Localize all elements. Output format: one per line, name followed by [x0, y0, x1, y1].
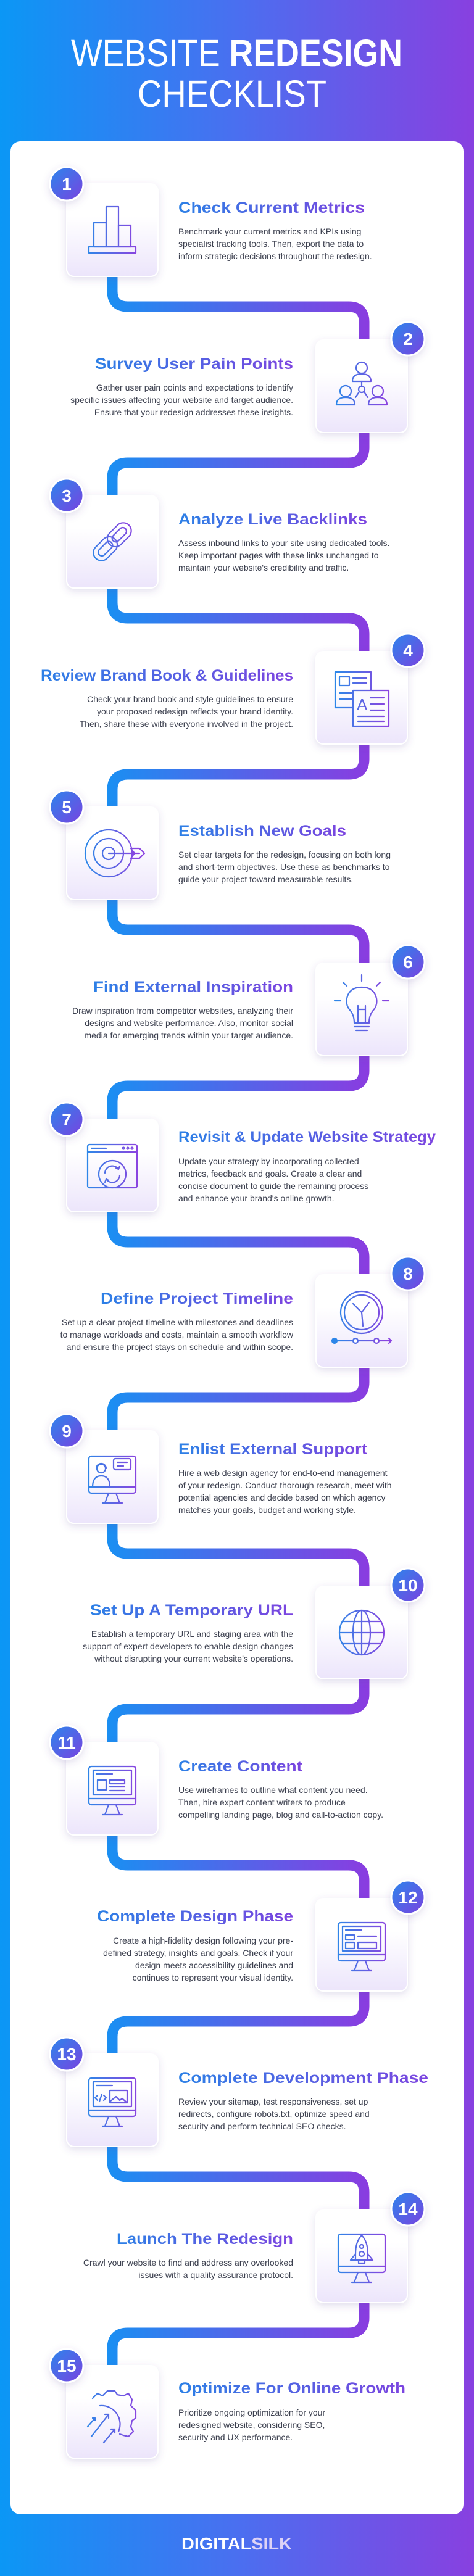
icon: gear with arrows: [88, 2391, 136, 2443]
body 8: Set up a clear project timeline with milestones and deadlines: [62, 1317, 293, 1327]
step 11: Create Content: [50, 1726, 383, 1835]
icon box 11: [67, 1742, 158, 1835]
body 13: Review your sitemap, test responsiveness, set up: [178, 2097, 368, 2106]
heading 7: Revisit & Update Website Strategy: [178, 1129, 436, 1146]
body 2: specific issues affecting your website and target audience.: [70, 395, 293, 405]
body 8: to manage workloads and costs, maintain a smooth workflow: [60, 1330, 294, 1340]
heading 1: Check Current Metrics: [178, 199, 365, 217]
heading 3: Analyze Live Backlinks: [178, 511, 367, 528]
heading 2: Survey User Pain Points: [95, 355, 293, 373]
step 10: Set Up A Temporary URL: [83, 1568, 425, 1679]
badge 7: 7: [62, 1110, 72, 1129]
badge 8: [391, 1257, 425, 1290]
body 3: Keep important pages with these links unchanged to: [178, 550, 379, 560]
body 7: concise document to guide the remaining process: [178, 1181, 368, 1191]
step 12: Complete Design Phase: [97, 1881, 425, 1991]
body 1: inform strategic decisions throughout the redesign.: [178, 251, 372, 261]
body 4: Then, share these with everyone involved in the project.: [80, 719, 293, 729]
icon: monitor layout: [89, 1766, 136, 1815]
heading 5: Establish New Goals: [178, 822, 346, 840]
body 5: and short-term objectives. Use these as benchmarks to: [178, 862, 390, 872]
body 11: Then, hire expert content writers to produce: [178, 1797, 346, 1807]
title: CHECKLIST: [138, 73, 326, 115]
badge 3: 3: [62, 486, 72, 505]
badge 6: 6: [403, 953, 413, 972]
badge 15: 15: [57, 2356, 77, 2375]
badge 4: 4: [403, 641, 413, 660]
body 9: of your redesign. Conduct thorough research, meet with: [178, 1480, 392, 1490]
badge 2: 2: [403, 329, 413, 349]
icon: monitor design: [338, 1923, 385, 1971]
badge 12: [391, 1881, 425, 1914]
icon: documents: [335, 672, 389, 726]
icon: light bulb: [335, 975, 389, 1030]
title: WEBSITE REDESIGN: [71, 32, 402, 74]
icon box 3: [67, 495, 158, 588]
step 4: Review Brand Book & Guidelines: [41, 634, 425, 744]
badge 13: 13: [57, 2045, 77, 2064]
icon: bar chart: [89, 207, 136, 253]
body 14: Crawl your website to find and address any overlooked: [83, 2258, 293, 2267]
heading 15: Optimize For Online Growth: [178, 2380, 405, 2397]
body 6: designs and website performance. Also, monitor social: [85, 1018, 293, 1028]
icon: people network: [336, 362, 387, 405]
badge 4: [391, 634, 425, 667]
body 15: security and UX performance.: [178, 2432, 293, 2442]
badge 7: [50, 1103, 83, 1136]
heading 8: Define Project Timeline: [101, 1290, 293, 1307]
step 5: Establish New Goals: [50, 790, 391, 900]
body 2: Gather user pain points and expectations to identify: [96, 383, 293, 392]
step 15: Optimize For Online Growth: [50, 2349, 405, 2458]
step 7: Revisit & Update Website Strategy: [50, 1103, 436, 1212]
body 3: Assess inbound links to your site using dedicated tools.: [178, 538, 389, 548]
icon box 13: [67, 2054, 158, 2147]
badge 5: [50, 790, 83, 824]
step 14: Launch The Redesign: [83, 2192, 425, 2303]
icon: monitor rocket: [338, 2234, 385, 2282]
body 11: compelling landing page, blog and call-to-action copy.: [178, 1810, 383, 1820]
badge 3: [50, 479, 83, 512]
body 10: without disrupting your current website’s operations.: [94, 1654, 293, 1663]
heading 6: Find External Inspiration: [93, 979, 293, 996]
icon: clock timeline: [332, 1291, 391, 1343]
body 2: Ensure that your redesign addresses these insights.: [94, 407, 293, 417]
icon box 1: [67, 184, 158, 276]
icon: globe: [339, 1610, 384, 1655]
body 15: Prioritize ongoing optimization for your: [178, 2408, 325, 2417]
badge 11: 11: [57, 1733, 76, 1752]
icon box 15: [67, 2366, 158, 2458]
body 10: support of expert developers to enable design changes: [83, 1641, 293, 1651]
body 12: defined strategy, insights and goals. Check if your: [103, 1948, 293, 1958]
badge 1: [50, 167, 83, 201]
body 11: Use wireframes to outline what content you need.: [178, 1785, 368, 1795]
badge 1: 1: [62, 175, 72, 194]
badge 13: [50, 2037, 83, 2071]
icon box 8: [316, 1275, 407, 1367]
heading 4: Review Brand Book & Guidelines: [41, 667, 293, 684]
icon: monitor code: [89, 2078, 136, 2126]
body 1: Benchmark your current metrics and KPIs using: [178, 226, 361, 236]
heading 12: Complete Design Phase: [97, 1908, 293, 1925]
badge 9: [50, 1414, 83, 1447]
icon: documents: A: [357, 695, 368, 714]
body 5: Set clear targets for the redesign, focusing on both long: [178, 850, 391, 859]
icon: chain link: [90, 520, 135, 564]
body 13: security and perform technical SEO checks.: [178, 2121, 346, 2131]
heading 13: Complete Development Phase: [178, 2069, 428, 2087]
body 10: Establish a temporary URL and staging area with the: [91, 1629, 293, 1639]
icon box 9: [67, 1431, 158, 1523]
icon box 5: [67, 807, 158, 900]
badge 2: [391, 322, 425, 355]
badge 10: [391, 1568, 425, 1602]
badge 6: [391, 945, 425, 979]
body 8: and ensure the project stays on schedule and within scope.: [67, 1342, 293, 1352]
step 6: Find External Inspiration: [72, 945, 425, 1056]
icon box 14: [316, 2210, 407, 2303]
body 12: Create a high-fidelity design following your pre-: [113, 1936, 293, 1945]
step 2: Survey User Pain Points: [70, 322, 425, 433]
step 3: Analyze Live Backlinks: [50, 479, 389, 588]
body 7: metrics, feedback and goals. Create a clear and: [178, 1169, 362, 1178]
icon box 2: [316, 340, 407, 433]
step 1: Check Current Metrics: [50, 167, 372, 276]
step 13: Complete Development Phase: [50, 2037, 428, 2147]
body 1: specialist tracking tools. Then, export the data to: [178, 239, 364, 249]
body 9: potential agencies and decide based on which agency: [178, 1493, 385, 1502]
icon: target: [85, 830, 144, 877]
body 15: redesigned website, considering SEO,: [178, 2420, 325, 2430]
body 3: maintain your website's credibility and traffic.: [178, 563, 349, 573]
body 7: Update your strategy by incorporating collected: [178, 1156, 359, 1166]
body 7: and enhance your brand's online growth.: [178, 1193, 335, 1203]
badge 10: 10: [398, 1576, 418, 1595]
icon box 10: [316, 1586, 407, 1679]
body 13: redirects, configure robots.txt, optimize speed and: [178, 2109, 370, 2119]
badge 8: 8: [403, 1264, 413, 1283]
connector path: [112, 271, 364, 2375]
footer logo: DIGITALSILK: [181, 2534, 292, 2553]
body 12: design meets accessibility guidelines and: [135, 1960, 293, 1970]
step 9: Enlist External Support: [50, 1414, 392, 1523]
badge 14: [391, 2192, 425, 2226]
body 9: matches your goals, budget and working style.: [178, 1505, 356, 1515]
heading 14: Launch The Redesign: [117, 2230, 293, 2248]
body 6: media for emerging trends within your target audience.: [84, 1030, 293, 1040]
body 14: issues with a quality assurance protocol.: [138, 2270, 293, 2280]
body 4: Check your brand book and style guidelines to ensure: [87, 694, 293, 704]
body 5: guide your project toward measurable results.: [178, 874, 353, 884]
badge 12: 12: [398, 1888, 418, 1907]
heading 11: Create Content: [178, 1758, 303, 1775]
badge 11: [50, 1726, 83, 1759]
icon box 4: [316, 652, 407, 744]
heading 9: Enlist External Support: [178, 1441, 368, 1458]
heading 10: Set Up A Temporary URL: [90, 1602, 293, 1619]
icon: support monitor: [89, 1456, 136, 1503]
badge 5: 5: [62, 798, 72, 817]
step 8: Define Project Timeline: [60, 1257, 425, 1367]
badge 9: 9: [62, 1422, 72, 1441]
icon box 6: [316, 963, 407, 1056]
body 6: Draw inspiration from competitor websites, analyzing their: [72, 1006, 293, 1016]
icon box 12: [316, 1899, 407, 1991]
icon: browser refresh: [88, 1145, 137, 1188]
body 9: Hire a web design agency for end-to-end management: [178, 1468, 388, 1478]
body 4: your proposed redesign reflects your brand identity.: [97, 706, 293, 716]
icon box 7: [67, 1119, 158, 1212]
badge 15: [50, 2349, 83, 2382]
body 12: continues to represent your visual identity.: [133, 1973, 293, 1982]
title: [71, 32, 402, 115]
badge 14: 14: [398, 2200, 418, 2219]
